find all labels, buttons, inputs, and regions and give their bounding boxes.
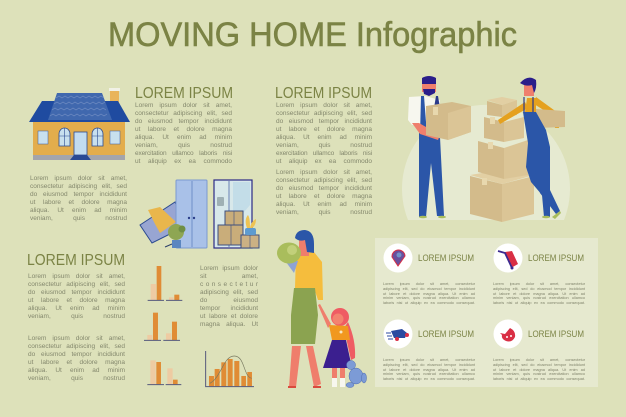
text block: section one: [135, 102, 232, 165]
text block: section one: Lorem ipsum dolor sit amet,: [135, 102, 232, 109]
illustration: movers with boxes: [402, 76, 570, 222]
text block: section three lower: Lorem ipsum dolor sit amet,: [28, 335, 125, 342]
text block: section two lower: consectetur adipiscing elit, sed: [276, 177, 372, 184]
text block: section one: ut labore et dolore magna: [135, 126, 232, 133]
text block: section three lower: do eiusmod tempor incididunt: [28, 351, 125, 358]
item text: [493, 282, 585, 305]
text block: beside charts: Lorem ipsum dolor: [200, 265, 258, 272]
text block: section one: veniam, quis nostrud: [135, 142, 232, 149]
item text: Lorem ipsum dolor sit amet, consectetur: [493, 358, 585, 362]
text block: section two upper: exercitation ullamco laboris nisi: [276, 150, 372, 157]
text block: under house: ut labore et dolore magna: [30, 199, 127, 206]
teddy bear: [346, 360, 366, 388]
text block: section three upper: consectetur adipiscing elit, sed: [28, 281, 125, 288]
title: MOVING HOME Infographic: [108, 16, 517, 54]
item: hand truck: [493, 244, 585, 305]
text block: section two upper: [276, 102, 372, 165]
text block: section two lower: aliqua. Ut enim ad minim: [276, 201, 372, 208]
item text: Lorem ipsum dolor sit amet, consectetur: [493, 282, 585, 286]
item text: adipiscing elit, sed do eiusmod tempor incididunt: [383, 363, 475, 367]
text block: beside charts: do eiusmod: [200, 297, 258, 304]
text block: section one: aliqua. Ut enim ad minim: [135, 134, 232, 141]
text block: section two upper: ut labore et dolore magna: [276, 126, 372, 133]
item text: [383, 358, 475, 381]
item text: minim veniam, quis nostrud exercitation ullamco: [493, 296, 585, 300]
heading: section one: LOREM IPSUM: [135, 85, 233, 102]
text block: section two upper: ut aliquip ex ea commodo: [276, 158, 372, 165]
item text: adipiscing elit, sed do eiusmod tempor incididunt: [493, 287, 585, 291]
text block: beside charts: c o n s e c t e t u r: [200, 281, 258, 288]
item: location: [383, 244, 475, 305]
item text: ut labore et dolore magna aliqua. Ut enim ad: [493, 292, 585, 296]
text block: under house: consectetur adipiscing elit, sed: [30, 183, 127, 190]
text block: section two upper: aliqua. Ut enim ad minim: [276, 134, 372, 141]
woman: [277, 230, 323, 388]
text block: section three upper: do eiusmod tempor incididunt: [28, 289, 125, 296]
text block: section one: consectetur adipiscing elit, sed: [135, 110, 232, 117]
item text: Lorem ipsum dolor sit amet, consectetur: [383, 282, 475, 286]
item text: adipiscing elit, sed do eiusmod tempor incididunt: [493, 363, 585, 367]
panel: services: [375, 238, 598, 387]
icon: house: [29, 88, 130, 160]
text block: section three upper: aliqua. Ut enim ad minim: [28, 305, 125, 312]
text block: section two upper: Lorem ipsum dolor sit amet,: [276, 102, 372, 109]
text block: under house: Lorem ipsum dolor sit amet,: [30, 175, 127, 182]
icon: red bird: [494, 320, 522, 348]
item text: minim veniam, quis nostrud exercitation ullamco: [383, 296, 475, 300]
icon: fast truck: [384, 320, 412, 348]
text block: beside charts: [200, 265, 258, 328]
text block: section two lower: ut labore et dolore magna: [276, 193, 372, 200]
text block: under house: [30, 175, 127, 222]
text block: section three lower: ut labore et dolore magna: [28, 359, 125, 366]
item text: ut labore et dolore magna aliqua. Ut enim ad: [383, 368, 475, 372]
text block: section one: do eiusmod tempor incididunt: [135, 118, 232, 125]
text block: section three upper: veniam, quis nostrud: [28, 313, 125, 320]
bar chart: middle: [144, 313, 180, 340]
text block: under house: aliqua. Ut enim ad minim: [30, 207, 127, 214]
item text: Lorem ipsum dolor sit amet, consectetur: [383, 358, 475, 362]
item text: [493, 358, 585, 381]
text block: beside charts: ut labore et dolore: [200, 313, 258, 320]
text block: section three upper: Lorem ipsum dolor sit amet,: [28, 273, 125, 280]
text block: section two upper: consectetur adipiscing elit, sed: [276, 110, 372, 117]
item text: laboris nisi ut aliquip ex ea commodo consequat.: [383, 301, 475, 305]
text block: under house: veniam, quis nostrud: [30, 215, 127, 222]
text block: under house: do eiusmod tempor incididunt: [30, 191, 127, 198]
box stack: [470, 97, 534, 222]
background circle: [402, 105, 570, 220]
text block: section two lower: veniam, quis nostrud: [276, 209, 372, 216]
item text: minim veniam, quis nostrud exercitation ullamco: [383, 372, 475, 376]
item text: ut labore et dolore magna aliqua. Ut enim ad: [383, 292, 475, 296]
text block: section one: exercitation ullamco laboris nisi: [135, 150, 232, 157]
text block: section three lower: consectetur adipiscing elit, sed: [28, 343, 125, 350]
item text: [383, 282, 475, 305]
item text: minim veniam, quis nostrud exercitation ullamco: [493, 372, 585, 376]
icon: location pin: [384, 244, 412, 272]
bar chart: bottom: [147, 360, 181, 385]
bar chart: top: [148, 266, 182, 300]
icon: hand truck: [494, 244, 522, 272]
mover two: [498, 78, 565, 219]
text block: section two lower: Lorem ipsum dolor sit amet,: [276, 169, 372, 176]
item text: adipiscing elit, sed do eiusmod tempor incididunt: [383, 287, 475, 291]
text block: beside charts: tempor incididunt: [200, 305, 258, 312]
item text: laboris nisi ut aliquip ex ea commodo consequat.: [383, 377, 475, 381]
text block: section three lower: aliqua. Ut enim ad minim: [28, 367, 125, 374]
item text: laboris nisi ut aliquip ex ea commodo consequat.: [493, 301, 585, 305]
item: packing: [493, 320, 585, 381]
heading: section two: LOREM IPSUM: [275, 85, 372, 102]
text block: beside charts: adipiscing elit, sed: [200, 289, 258, 296]
mover one: [408, 76, 471, 218]
text block: section three upper: [28, 273, 125, 320]
text block: section two upper: do eiusmod tempor incididunt: [276, 118, 372, 125]
text block: section two lower: [276, 169, 372, 216]
item text: ut labore et dolore magna aliqua. Ut enim ad: [493, 368, 585, 372]
text block: section three lower: veniam, quis nostrud: [28, 375, 125, 382]
illustration: woman and girl: [277, 230, 366, 388]
item text: laboris nisi ut aliquip ex ea commodo consequat.: [493, 377, 585, 381]
text block: section three lower: [28, 335, 125, 382]
girl: [318, 304, 355, 387]
text block: section two lower: do eiusmod tempor incididunt: [276, 185, 372, 192]
heading: section three: LOREM IPSUM: [27, 252, 125, 269]
text block: beside charts: magna aliqua. Ut: [200, 321, 258, 328]
illustration: wardrobe and boxes: [140, 180, 259, 248]
text block: section two upper: veniam, quis nostrud: [276, 142, 372, 149]
item: delivery: [383, 320, 475, 381]
text block: beside charts: sit amet,: [200, 273, 258, 280]
text block: section three upper: ut labore et dolore magna: [28, 297, 125, 304]
text block: section one: ut aliquip ex ea commodo: [135, 158, 232, 165]
histogram with curve: [206, 351, 254, 387]
